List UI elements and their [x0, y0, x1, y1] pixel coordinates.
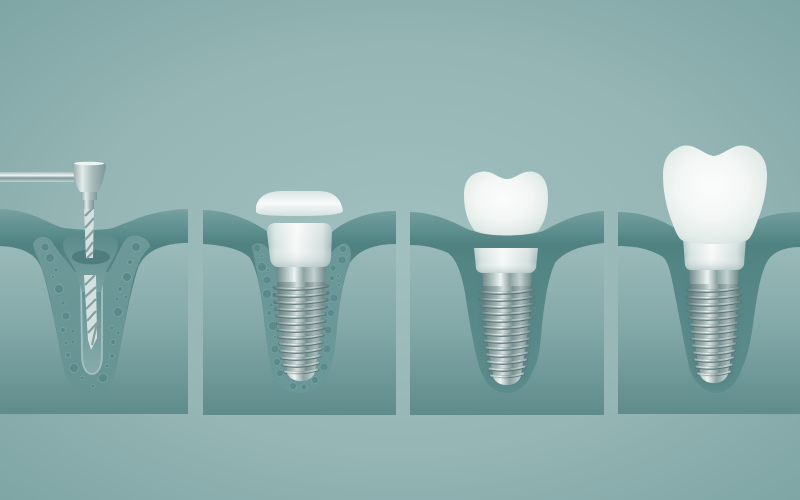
drill bit upper — [84, 208, 94, 258]
panel 2 bone — [252, 243, 351, 393]
panel 3 background — [410, 230, 604, 415]
panel 2: healing abutment and cap — [203, 191, 396, 415]
panel 2 cap — [256, 191, 343, 216]
panel 4 implant screw — [688, 269, 740, 383]
panel 4 gum shadow around implant — [691, 280, 737, 382]
panel 2 implant screw — [274, 267, 328, 381]
panel 3 abutment — [474, 248, 538, 273]
panel 3 crown — [464, 171, 548, 236]
panel 1 bone pores — [41, 242, 140, 388]
drill head — [72, 162, 106, 209]
panel 4 gum — [618, 212, 800, 393]
panel 2 background — [203, 230, 396, 415]
drill handpiece arm — [0, 172, 74, 182]
panel 4 crown — [663, 146, 767, 244]
panel 1 background — [0, 230, 188, 414]
panel 3 gum shadow around implant — [484, 280, 530, 382]
panel 1 funnel opening — [63, 233, 118, 292]
panel 1: drilling the bone — [0, 162, 188, 414]
panel 2 bone pores — [253, 244, 346, 390]
panel 4 background — [618, 230, 800, 414]
panel 1 gum — [0, 209, 188, 393]
panel 2 healing abutment — [267, 223, 332, 267]
panel 4 abutment — [683, 238, 746, 270]
panel 3 implant screw — [480, 271, 534, 385]
panel 1 bone — [33, 236, 150, 393]
panel 4: final crown — [618, 146, 800, 414]
drill bit lower — [84, 275, 97, 350]
panel 2 gum — [203, 210, 396, 393]
panel 3 gum — [410, 211, 604, 393]
panel 1 drilled socket — [81, 280, 102, 374]
panel 1 pilot hole rim — [72, 250, 110, 264]
panel 3: crown seated with gum closed — [410, 171, 604, 415]
